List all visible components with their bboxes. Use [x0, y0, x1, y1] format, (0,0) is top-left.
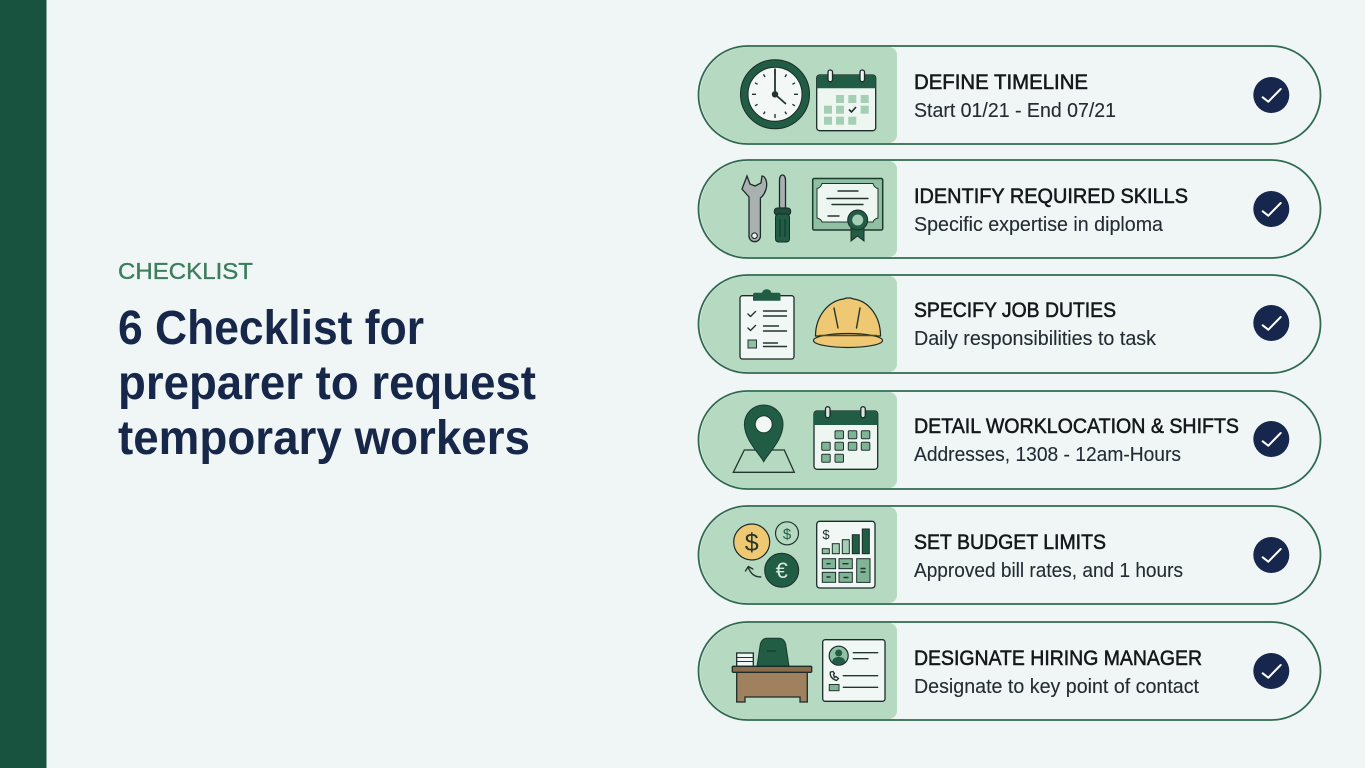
heading: DEFINE TIMELINE: [914, 71, 1088, 94]
description: Designate to key point of contact: [914, 676, 1199, 698]
icon: map pin: [733, 405, 794, 472]
icon: shift calendar: [814, 407, 878, 469]
icon: desk with chair: [732, 638, 812, 702]
title: 6 Checklist for: [118, 302, 424, 355]
heading: IDENTIFY REQUIRED SKILLS: [914, 185, 1188, 208]
title: temporary workers: [118, 412, 530, 465]
panel: identify required skills: [698, 160, 1320, 258]
description: Daily responsibilities to task: [914, 328, 1157, 350]
check badge: [1253, 421, 1289, 457]
eyebrow label: CHECKLIST: [118, 258, 253, 284]
icon: contact card: [823, 640, 885, 701]
icon: clipboard checklist: [740, 289, 794, 359]
title: preparer to request: [118, 357, 536, 410]
description: Addresses, 1308 - 12am-Hours: [914, 444, 1181, 466]
check badge: [1253, 77, 1289, 113]
icon: budget calculator chart: [817, 521, 875, 588]
sidebar band: [0, 0, 46, 768]
panel: specify job duties: [698, 275, 1320, 373]
description: Start 01/21 - End 07/21: [914, 100, 1116, 122]
icon: hard hat: [814, 298, 882, 348]
icon: diploma certificate: [813, 178, 883, 241]
panel: set budget limits: [698, 506, 1320, 604]
icon: currency coins: [734, 522, 799, 587]
icon: currency coins: $: [745, 529, 759, 557]
icon: calendar with check: [817, 70, 876, 131]
panel: detail work location and shifts: [698, 391, 1320, 489]
icon: currency coins: €: [776, 558, 788, 583]
description: Approved bill rates, and 1 hours: [914, 560, 1183, 582]
icon: budget calculator chart: $: [822, 527, 830, 542]
heading: SPECIFY JOB DUTIES: [914, 299, 1116, 322]
heading: SET BUDGET LIMITS: [914, 531, 1106, 554]
heading: DETAIL WORKLOCATION & SHIFTS: [914, 415, 1239, 438]
icon: wrench: [742, 176, 767, 242]
check badge: [1253, 653, 1289, 689]
icon: currency coins: $: [783, 526, 792, 543]
check badge: [1253, 537, 1289, 573]
panel: define timeline: [698, 46, 1320, 144]
title: [118, 302, 536, 465]
description: Specific expertise in diploma: [914, 214, 1164, 236]
check badge: [1253, 191, 1289, 227]
panel: designate hiring manager: [698, 622, 1320, 720]
icon: screwdriver: [774, 175, 791, 242]
icon: clock: [740, 60, 810, 129]
heading: DESIGNATE HIRING MANAGER: [914, 647, 1202, 670]
check badge: [1253, 305, 1289, 341]
